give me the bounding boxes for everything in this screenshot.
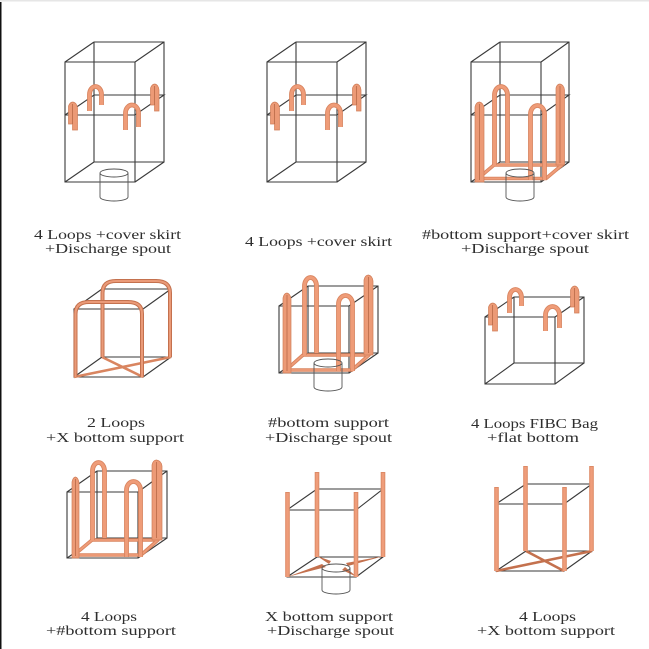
bottom support frame and loops	[475, 84, 564, 182]
caption: 2 Loops	[87, 416, 145, 431]
caption: +Discharge spout	[45, 242, 171, 257]
caption: X bottom support	[265, 610, 393, 625]
bag wireframe	[267, 42, 366, 182]
bag wireframe	[485, 297, 584, 384]
discharge spout	[506, 169, 534, 201]
discharge spout	[314, 359, 342, 391]
corner posts	[496, 466, 592, 571]
caption: +#bottom support	[46, 624, 176, 639]
panel: 4 loops, bottom support	[46, 460, 176, 639]
caption: +flat bottom	[487, 431, 579, 446]
caption: +X bottom support	[46, 431, 184, 446]
two loops	[76, 281, 170, 377]
discharge spout	[322, 564, 350, 594]
panel: 4 loops, cover skirt, discharge spout	[34, 42, 181, 257]
discharge spout	[100, 169, 128, 201]
caption: 4 Loops FIBC Bag	[471, 417, 598, 432]
panel: 4 loops, X bottom support	[477, 466, 615, 639]
caption: +Discharge spout	[461, 242, 589, 257]
caption: +Discharge spout	[267, 624, 394, 639]
bag wireframe	[74, 289, 171, 377]
caption: #bottom support+cover skirt	[422, 228, 629, 243]
X bottom straps	[287, 556, 384, 577]
bag wireframe	[65, 42, 164, 182]
bag wireframe	[279, 286, 378, 373]
panel: bottom support, discharge spout	[265, 275, 392, 446]
X bottom straps	[496, 551, 592, 571]
lifting loops	[488, 286, 579, 331]
caption: 4 Loops +cover skirt	[245, 235, 392, 250]
panel: 2 loops, X bottom support	[46, 281, 184, 446]
bag wireframe	[471, 42, 569, 182]
bottom support frame and loops	[283, 275, 373, 373]
caption: 4 Loops +cover skirt	[34, 228, 181, 243]
corner posts	[288, 472, 383, 577]
caption: #bottom support	[268, 416, 389, 431]
caption: 4 Loops	[81, 610, 137, 625]
lifting loops	[68, 84, 159, 130]
panel: 4 loops, cover skirt	[245, 42, 392, 250]
caption: 4 Loops	[519, 610, 576, 625]
caption: +Discharge spout	[265, 431, 392, 446]
bag wireframe	[287, 489, 383, 577]
X bottom straps	[74, 357, 171, 377]
panel: bottom support, cover skirt, discharge spout	[422, 42, 629, 257]
lifting loops	[270, 84, 361, 130]
bottom support frame and loops	[72, 460, 162, 558]
panel: 4 loops FIBC bag, flat bottom	[471, 286, 598, 446]
bag wireframe	[496, 484, 592, 571]
bag wireframe	[67, 471, 167, 558]
caption: +X bottom support	[477, 624, 615, 639]
panel: X bottom support, discharge spout	[265, 472, 394, 639]
